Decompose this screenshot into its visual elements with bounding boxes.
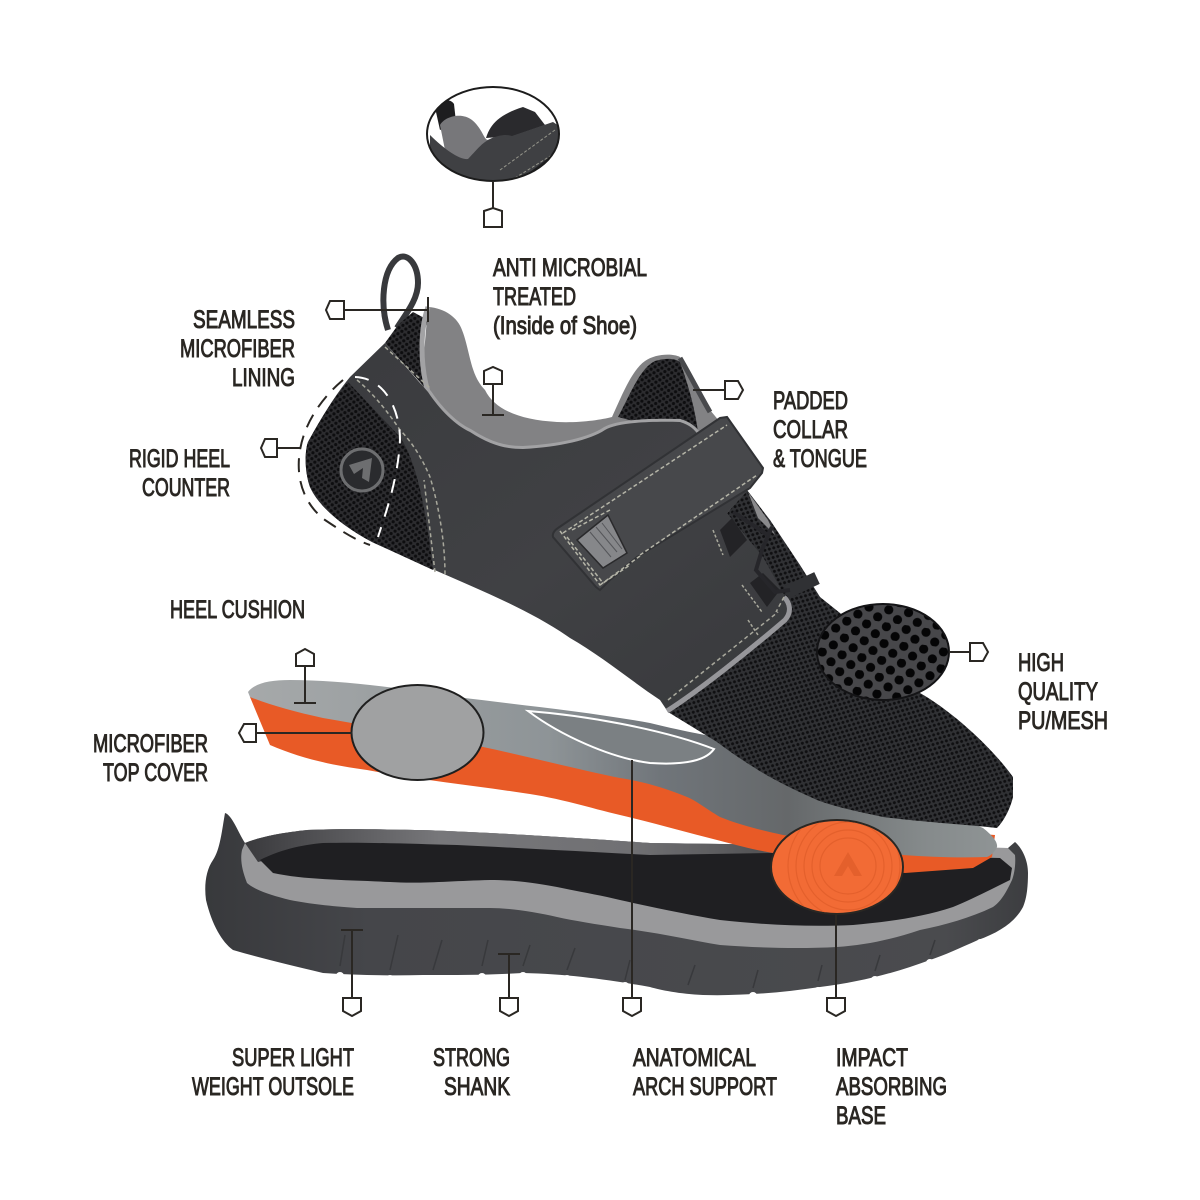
- label: rigid heel counter: COUNTER: [142, 474, 230, 502]
- label: padded collar: & TONGUE: [773, 445, 867, 473]
- label: seamless lining: SEAMLESS: [193, 306, 295, 334]
- label: strong shank: [433, 1044, 510, 1101]
- label: impact base: BASE: [836, 1102, 886, 1130]
- label: seamless lining: [180, 306, 295, 392]
- label: impact base: [836, 1044, 947, 1130]
- label: arch support: ANATOMICAL: [633, 1044, 756, 1072]
- marker: microfiber top cover: [239, 724, 352, 742]
- label: seamless lining: LINING: [232, 364, 295, 392]
- label: strong shank: STRONG: [433, 1044, 510, 1072]
- label: outsole: SUPER LIGHT: [232, 1044, 354, 1072]
- label: seamless lining: MICROFIBER: [180, 335, 295, 363]
- label: rigid heel counter: [129, 445, 230, 502]
- collar lining: [420, 307, 735, 470]
- icon: high quality mesh swatch: [817, 604, 949, 700]
- label: high quality mesh: HIGH: [1018, 649, 1064, 677]
- label: high quality mesh: PU/MESH: [1018, 707, 1108, 735]
- marker: padded collar: [693, 381, 743, 399]
- heel mesh panel: [306, 382, 433, 570]
- label: padded collar: PADDED: [773, 387, 848, 415]
- marker: rigid heel: [261, 439, 300, 457]
- main leather body: [306, 343, 790, 712]
- label: arch support: ARCH SUPPORT: [633, 1073, 777, 1101]
- lace loops: [713, 512, 817, 635]
- marker: anti microbial: [482, 367, 504, 415]
- insole: [248, 680, 997, 873]
- marker: high quality: [949, 643, 988, 661]
- label: heel cushion: HEEL CUSHION: [170, 596, 305, 624]
- label: anti microbial: TREATED: [493, 283, 576, 311]
- icon: shoe interior detail inset: [427, 87, 565, 185]
- stitching: [357, 347, 445, 575]
- label: impact base: IMPACT: [836, 1044, 908, 1072]
- velcro strap: [553, 417, 763, 590]
- label: anti microbial: ANTI MICROBIAL: [493, 254, 647, 282]
- label: arch support: [633, 1044, 777, 1101]
- marker: shank: [498, 954, 520, 1016]
- label: anti microbial: [493, 254, 647, 340]
- strap patch: [577, 515, 627, 568]
- label: rigid heel counter: RIGID HEEL: [129, 445, 230, 473]
- icon: impact absorbing base swatch: [770, 819, 904, 915]
- label: microfiber top cover: MICROFIBER: [93, 730, 208, 758]
- heel logo: [341, 449, 383, 491]
- icon: microfiber swatch: [352, 685, 484, 780]
- label: strong shank: SHANK: [444, 1073, 510, 1101]
- heel counter white dashed guide: [355, 377, 400, 537]
- front trim: [667, 597, 789, 711]
- marker: impact: [827, 914, 845, 1016]
- label: high quality mesh: [1018, 649, 1108, 735]
- marker: outsole: [341, 930, 363, 1016]
- label: high quality mesh: QUALITY: [1018, 678, 1098, 706]
- lug grooves: [340, 935, 935, 988]
- tongue mesh: [618, 359, 698, 432]
- collar trim: [428, 392, 698, 449]
- label: impact base: ABSORBING: [836, 1073, 947, 1101]
- heel collar mesh: [385, 312, 428, 390]
- pull loop: [383, 257, 418, 330]
- label: outsole: WEIGHT OUTSOLE: [192, 1073, 354, 1101]
- outsole: [205, 813, 1028, 1002]
- lug notches: [336, 939, 983, 1002]
- callout markers: [239, 297, 988, 1016]
- shoe upper: [306, 257, 1013, 828]
- label: microfiber top cover: TOP COVER: [103, 759, 208, 787]
- label: microfiber top cover: [93, 730, 208, 787]
- toe and vamp mesh: [668, 490, 1013, 828]
- label: anti microbial: (Inside of Shoe): [493, 312, 637, 340]
- label: outsole: [192, 1044, 354, 1101]
- heel counter dashed outline: [299, 380, 370, 545]
- label: padded collar: COLLAR: [773, 416, 848, 444]
- label: padded collar: [773, 387, 867, 473]
- callout marker: inset: [484, 181, 502, 227]
- marker: arch: [623, 760, 641, 1016]
- marker: seamless: [326, 297, 428, 322]
- marker: heel cushion: [294, 649, 316, 703]
